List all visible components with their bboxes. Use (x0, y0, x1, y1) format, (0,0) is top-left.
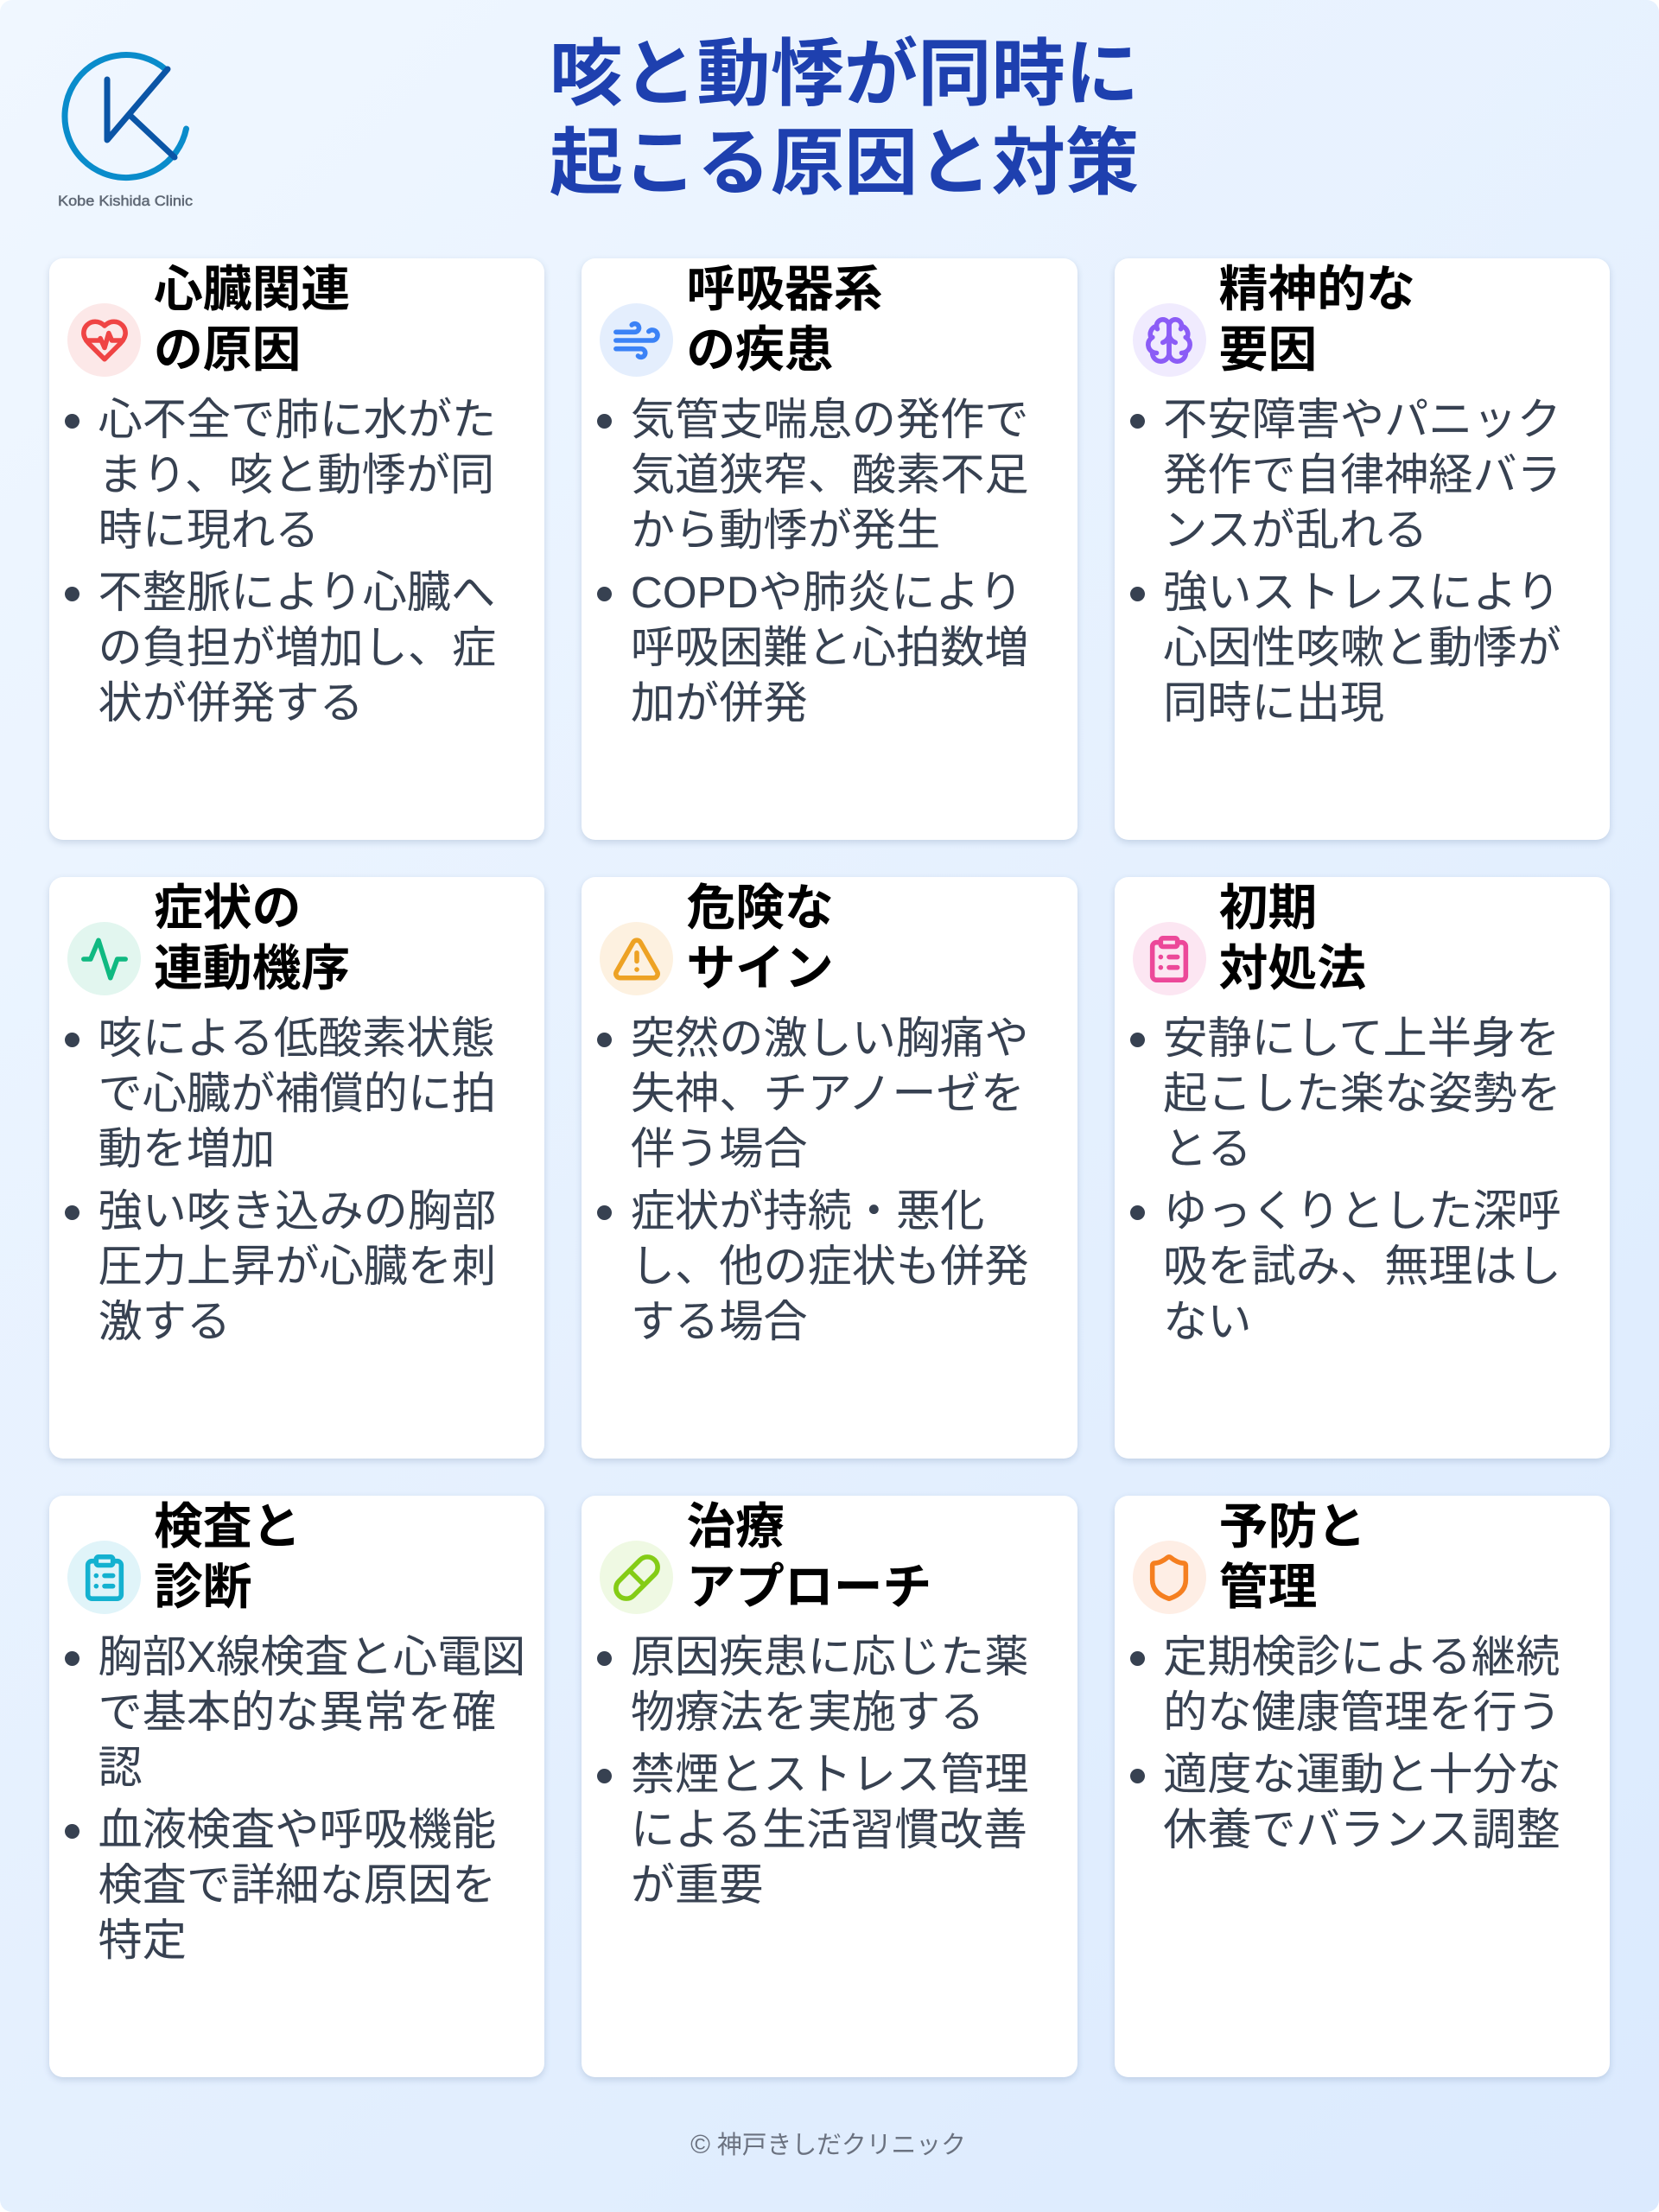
title: 咳と動悸が同時に (550, 34, 1139, 116)
icon: shield (1133, 1541, 1206, 1614)
text block: し、他の症状も併発 (631, 1242, 1029, 1291)
text block: COPDや肺炎により (631, 568, 1023, 617)
icon: wind (600, 303, 673, 377)
icon: activity (67, 922, 141, 995)
panel: 治療アプローチ (582, 1496, 1077, 2077)
text block: 検査で詳細な原因を (99, 1860, 496, 1910)
text block: で心臓が補償的に拍 (99, 1069, 496, 1118)
text block: 起こした楽な姿勢を (1163, 1069, 1561, 1118)
text block: 的な健康管理を行う (1163, 1688, 1561, 1737)
text block: とる (1163, 1124, 1252, 1173)
text block: 原因疾患に応じた薬 (631, 1632, 1029, 1681)
icon: clipboard pink (1133, 922, 1206, 995)
heading (686, 263, 883, 377)
heading: 検査と (154, 1500, 301, 1554)
text block: 適度な運動と十分な (1163, 1750, 1561, 1799)
panel: 症状の連動機序 (49, 877, 544, 1459)
text block: する場合 (631, 1297, 808, 1346)
panel: 検査と診断 (49, 1496, 544, 2077)
panel: 精神的な要因 (1115, 258, 1610, 840)
text block (65, 1632, 525, 1965)
text block: ゆっくりとした深呼 (1163, 1186, 1561, 1236)
text block: 心因性咳嗽と動悸が (1163, 623, 1561, 672)
heading: 初期 (1219, 881, 1317, 935)
text block: の負担が増加し、症 (99, 623, 496, 672)
text block: から動悸が発生 (631, 505, 940, 555)
panel: 初期対処法 (1115, 877, 1610, 1459)
text block (1130, 1632, 1561, 1854)
title (550, 34, 1139, 205)
logo: Kobe Kishida Clinic: Kobe Kishida Clinic (58, 193, 194, 209)
text block: 失神、チアノーゼを (631, 1069, 1025, 1118)
text block: 激する (99, 1297, 231, 1346)
panel: 心臓関連の原因 (49, 258, 544, 840)
text block: 胸部X線検査と心電図 (99, 1632, 525, 1681)
text block: で基本的な異常を確 (99, 1688, 496, 1737)
heading (154, 263, 350, 377)
text block: 強い咳き込みの胸部 (99, 1186, 496, 1236)
text block: 加が併発 (631, 678, 808, 728)
text block (597, 1014, 1029, 1346)
text block (1130, 395, 1561, 728)
text block: 物療法を実施する (631, 1688, 984, 1737)
text block: 気道狭窄、酸素不足 (631, 450, 1029, 499)
text block: 不整脈により心臓へ (99, 568, 495, 617)
text block: 吸を試み、無理はし (1163, 1242, 1561, 1291)
text block: 同時に出現 (1163, 678, 1384, 728)
heading (1219, 1500, 1366, 1614)
icon: pill (600, 1541, 673, 1614)
text block: 心不全で肺に水がた (99, 395, 496, 444)
text block: 咳による低酸素状態 (99, 1014, 495, 1063)
text block (1130, 1014, 1561, 1346)
text block: ンスが乱れる (1163, 505, 1427, 555)
text block: 特定 (99, 1916, 187, 1965)
text block: ない (1163, 1297, 1252, 1346)
text block: 時に現れる (99, 505, 319, 555)
heading: 連動機序 (154, 942, 350, 995)
text block: 定期検診による継続 (1163, 1632, 1560, 1681)
heading: 治療 (686, 1500, 785, 1554)
text block: 気管支喘息の発作で (631, 395, 1029, 444)
panel: 呼吸器系の疾患 (582, 258, 1077, 840)
text block (597, 395, 1029, 728)
heading (154, 1500, 301, 1614)
icon: brain (1133, 303, 1206, 377)
text block: 強いストレスにより (1163, 568, 1560, 617)
text block: 禁煙とストレス管理 (631, 1750, 1029, 1799)
heading: 危険な (686, 881, 834, 935)
heading: の原因 (154, 323, 301, 377)
text block: 圧力上昇が心臓を刺 (99, 1242, 496, 1291)
text block: 突然の激しい胸痛や (631, 1014, 1029, 1063)
icon: clipboard cyan (67, 1541, 141, 1614)
text block: による生活習慣改善 (631, 1805, 1027, 1854)
text block: 不安障害やパニック (1163, 395, 1561, 444)
heading: アプローチ (686, 1560, 931, 1614)
text block: 発作で自律神経バラ (1163, 450, 1561, 499)
text block (597, 1632, 1029, 1910)
text block: 呼吸困難と心拍数増 (631, 623, 1029, 672)
footer: © 神戸きしだクリニック (690, 2129, 966, 2159)
text block: 認 (99, 1743, 143, 1792)
text block: 休養でバランス調整 (1163, 1805, 1560, 1854)
heading: 症状の (154, 881, 301, 935)
heading: の疾患 (686, 323, 834, 377)
text block: まり、咳と動悸が同 (99, 450, 494, 499)
panel: 危険なサイン (582, 877, 1077, 1459)
text block (65, 1014, 496, 1346)
heading: 精神的な (1219, 263, 1415, 316)
text block: 状が併発する (99, 678, 364, 728)
heading (686, 881, 834, 995)
heading (686, 1500, 931, 1614)
heading: 予防と (1219, 1500, 1366, 1554)
heading: 呼吸器系 (686, 263, 883, 316)
icon: heart pulse (67, 303, 141, 377)
icon: warning triangle (600, 922, 673, 995)
heading: 診断 (154, 1560, 252, 1614)
heading: 要因 (1219, 323, 1317, 377)
text block: 動を増加 (99, 1124, 275, 1173)
logo: Kobe Kishida Clinic (58, 52, 194, 209)
text block: が重要 (631, 1860, 763, 1910)
text block (65, 395, 496, 728)
text block: 血液検査や呼吸機能 (99, 1805, 496, 1854)
heading: 対処法 (1219, 942, 1366, 995)
title: 起こる原因と対策 (550, 123, 1139, 205)
heading: 心臓関連 (154, 263, 350, 316)
heading (1219, 881, 1366, 995)
heading (1219, 263, 1415, 377)
text block: 伴う場合 (631, 1124, 808, 1173)
heading: 管理 (1219, 1560, 1317, 1614)
panel: 予防と管理 (1115, 1496, 1610, 2077)
heading (154, 881, 350, 995)
heading: サイン (686, 942, 834, 995)
text block: 安静にして上半身を (1163, 1014, 1560, 1063)
text block: 症状が持続・悪化 (631, 1186, 984, 1236)
